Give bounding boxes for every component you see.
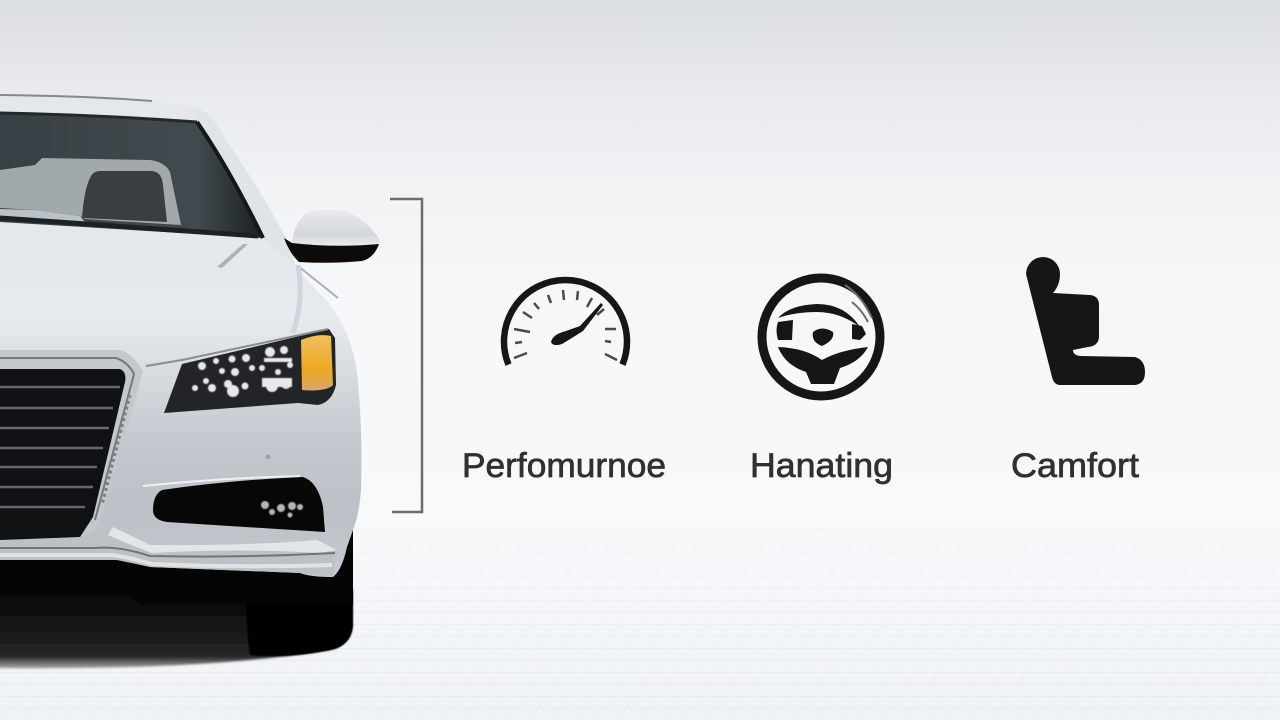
car body — [0, 222, 361, 577]
headlight — [146, 329, 336, 413]
sensor dot — [266, 454, 270, 460]
grille — [0, 369, 125, 540]
fog light — [143, 476, 325, 532]
needle — [551, 303, 603, 345]
bracket — [390, 199, 422, 512]
icon: steering wheel — [762, 278, 880, 396]
a pillar — [192, 108, 296, 270]
label: Performance: Perfomurnoe — [462, 447, 666, 485]
interior light area — [0, 158, 181, 225]
wiper and hood creases — [217, 244, 248, 268]
front seat — [82, 171, 167, 222]
side mirror — [292, 210, 380, 248]
car front view — [0, 94, 380, 668]
label: Handling: Hanating — [750, 447, 893, 485]
roof — [0, 94, 204, 124]
windshield — [0, 113, 263, 238]
tyre — [246, 590, 353, 656]
grille surround — [0, 350, 143, 545]
icon: speedometer gauge — [504, 280, 627, 365]
ground shadow — [0, 590, 352, 668]
icon: car seat — [1026, 257, 1145, 385]
lower black intake — [0, 528, 353, 605]
label: Comfort: Camfort — [1011, 447, 1140, 485]
dashboard edge — [0, 209, 85, 222]
lower trim — [0, 527, 337, 577]
